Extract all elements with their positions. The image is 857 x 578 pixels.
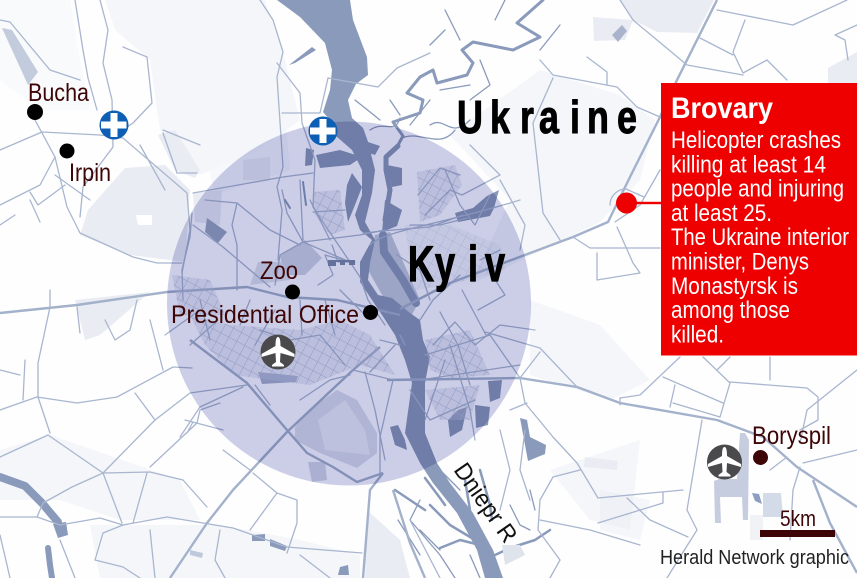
callout body text: killed. [671, 322, 724, 348]
airport: Boryspil runways [714, 433, 783, 540]
callout body text: at least 25. [671, 200, 772, 227]
city road network and dense blocks [172, 145, 535, 482]
callout body text: among those [671, 297, 790, 324]
icon: airport, Boryspil [707, 444, 742, 480]
callout body text: killing at least 14 [671, 152, 826, 178]
marker: Irpin [60, 144, 74, 158]
scale bar [760, 506, 835, 537]
label: Bucha: Bucha [28, 79, 89, 107]
icon: hospital cross, north Kyiv [308, 116, 338, 146]
callout body text: minister, Denys [671, 248, 809, 276]
scale bar: 5km [780, 506, 816, 531]
label: Ukraine: Ukraine [457, 92, 637, 143]
marker: Presidential Office [363, 305, 378, 320]
label: Boryspil: Boryspil [752, 422, 831, 450]
label: Irpin: Irpin [69, 159, 111, 187]
water: Dnieper river and reservoir [0, 0, 560, 578]
callout heading: Brovary [671, 92, 773, 125]
callout body text [671, 127, 849, 348]
marker: Zoo [285, 284, 300, 300]
marker: Boryspil [753, 450, 768, 465]
panel: Brovary callout [661, 83, 857, 356]
callout body text: Monastyrsk is [671, 273, 798, 300]
label: Dniepr R: Dniepr R [448, 458, 522, 548]
city shading circle [167, 122, 531, 486]
label: Zoo: Zoo [260, 257, 298, 285]
label: Presidential Office: Presidential Office [171, 301, 359, 329]
icon: airport, Kyiv Zhuliany [260, 334, 296, 370]
label: Kyiv: Kyiv [408, 237, 506, 292]
marker: Bucha [27, 104, 43, 120]
marker and leader: Brovary [616, 192, 662, 214]
icon: hospital cross, Bucha area [100, 110, 128, 140]
